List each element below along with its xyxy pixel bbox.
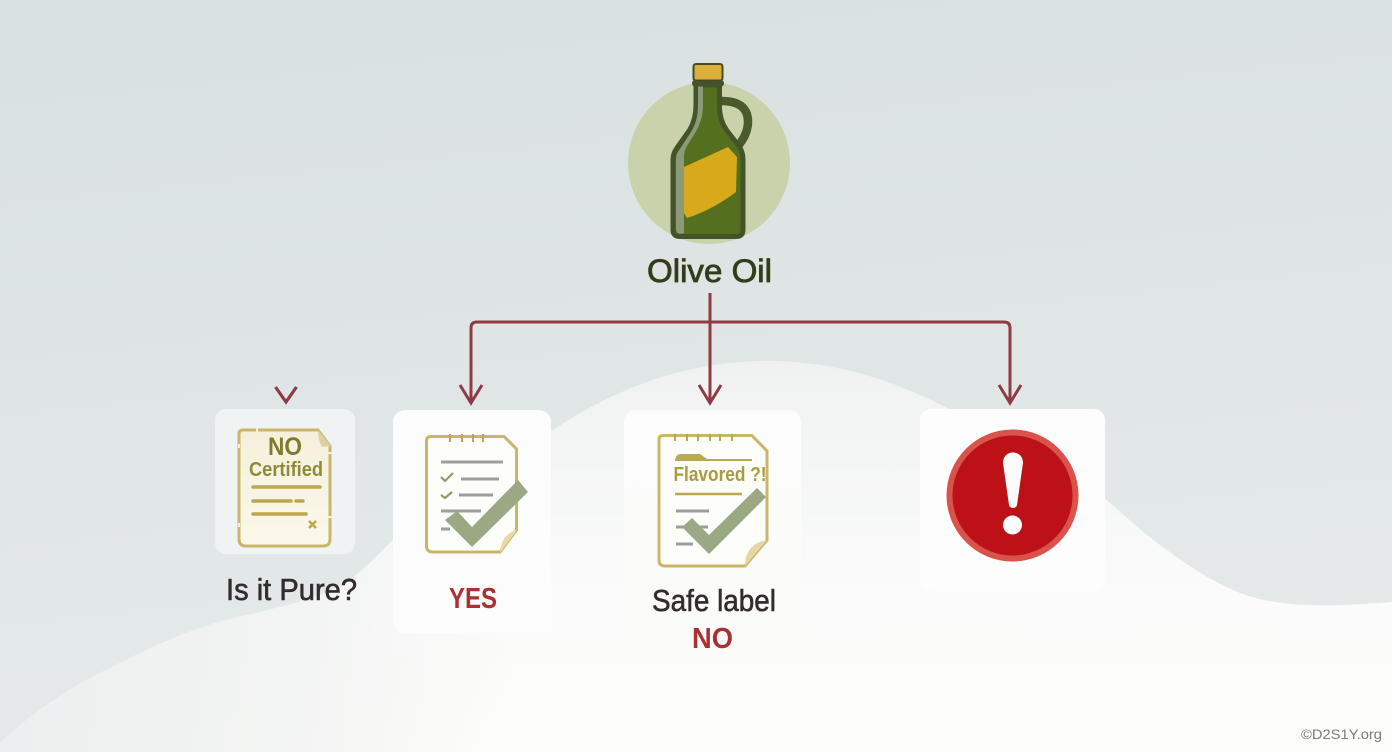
panel: Flavored card: [624, 410, 801, 660]
panel: Flavored card: Safe label: [652, 583, 776, 618]
panel: NO Certified card: NO: [268, 433, 302, 461]
arrows: branching flow from Olive Oil: [460, 293, 1021, 403]
arrow: small chevron above first card: [276, 387, 296, 402]
panel: Flavored card: Flavored ?!: [674, 464, 766, 486]
icon: olive oil bottle: [628, 64, 790, 244]
panel: NO Certified card: Certified: [249, 459, 323, 481]
panel: warning card: [920, 409, 1105, 591]
watermark: ©D2S1Y.org: [1301, 726, 1382, 742]
panel: Flavored card: NO: [692, 623, 733, 655]
label: Is it Pure?: Is it Pure?: [226, 572, 357, 607]
panel: YES card: [393, 410, 551, 633]
panel: NO Certified card: [215, 409, 355, 554]
panel: YES card: YES: [449, 583, 497, 615]
title: Olive Oil: Olive Oil: [647, 253, 772, 289]
